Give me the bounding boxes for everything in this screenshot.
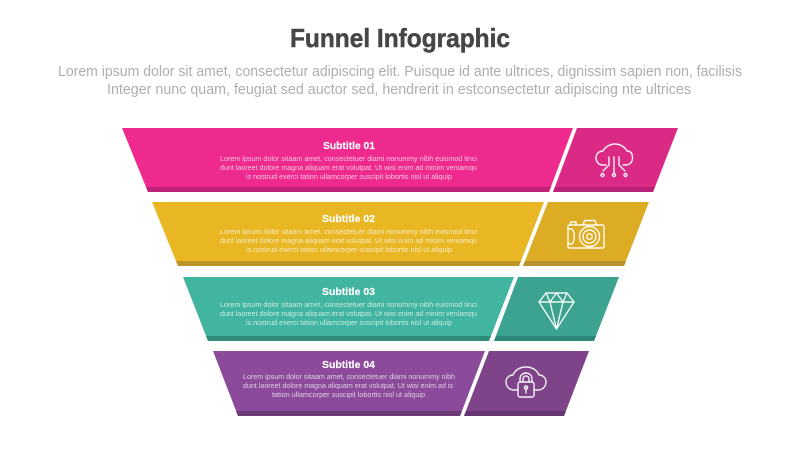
icon panel 3	[494, 277, 619, 341]
body text 4: Lorem ipsum dolor sitaam amet, consectetuer diami nonummy nibh	[243, 374, 455, 381]
text panel 4	[213, 351, 485, 416]
panel: funnel level 1	[122, 128, 678, 192]
body text 1	[220, 156, 477, 181]
icon: diamond	[539, 293, 574, 329]
body text 3: Lorem ipsum dolor sitaam amet, consectetuer diami nonummy nibh euismod tinci	[220, 302, 477, 309]
body text 1: Lorem ipsum dolor sitaam amet, consectetuer diami nonummy nibh euismod tinci	[220, 156, 477, 163]
icon: cloud with padlock	[506, 367, 546, 397]
text panel 1	[122, 128, 573, 192]
subtitle 01: Subtitle 01	[323, 141, 375, 152]
body text 4: dunt laoreet dolore magna aliquam erat volutpat. Ut wisi enim ad is	[243, 383, 454, 390]
body text 4: tation ullamcorper suscipit lobortis nisl ut aliquip	[272, 392, 425, 399]
intro text: Lorem ipsum dolor sit amet, consectetur adipiscing elit. Puisque id ante ultrices, dignissim sapien non, facilisis	[58, 63, 742, 80]
body text 1: is nostrud exerci tation ullamcorper suscipit lobortis nisl ut aliquip	[246, 174, 452, 181]
body text 1: dunt laoreet dolore magna aliquam erat volutpat. Ut wisi enim ad minim veniamqu	[220, 165, 477, 172]
icon panel 2	[523, 202, 649, 266]
text panel 2	[152, 202, 544, 266]
subtitle 04: Subtitle 04	[322, 360, 375, 371]
icon panel 1	[553, 128, 678, 192]
text panel 3	[183, 277, 514, 341]
body text 3: dunt laoreet dolore magna aliquam erat volutpat. Ut wisi enim ad minim veniamqu	[220, 311, 477, 318]
body text 4	[243, 374, 455, 399]
intro text	[58, 63, 742, 98]
panel: funnel level 3	[183, 277, 619, 341]
body text 3	[220, 302, 477, 327]
panel: funnel level 4	[213, 351, 589, 416]
subtitle 02: Subtitle 02	[322, 214, 375, 225]
panel: funnel level 2	[152, 202, 649, 266]
body text 2: dunt laoreet dolore magna aliquam erat volutpat. Ut wisi enim ad minim veniamqu	[220, 238, 477, 245]
intro text: Integer nunc quam, feugiat sed auctor sed, hendrerit in estconsectetur adipiscing nte ultrices	[107, 81, 691, 98]
subtitle 03: Subtitle 03	[322, 287, 375, 298]
body text 3: is nostrud exerci tation ullamcorper suscipit lobortis nisl ut aliquip	[246, 320, 452, 327]
body text 2	[220, 229, 477, 254]
title: Funnel Infographic	[290, 23, 510, 53]
body text 2: Lorem ipsum dolor sitaam amet, consectetuer diami nonummy nibh euismod tinci	[220, 229, 477, 236]
icon panel 4	[464, 351, 589, 416]
body text 2: is nostrud exerci tation ullamcorper suscipit lobortis nisl ut aliquip	[246, 247, 452, 254]
icon: network cloud	[596, 144, 632, 176]
icon: camera	[568, 220, 604, 248]
